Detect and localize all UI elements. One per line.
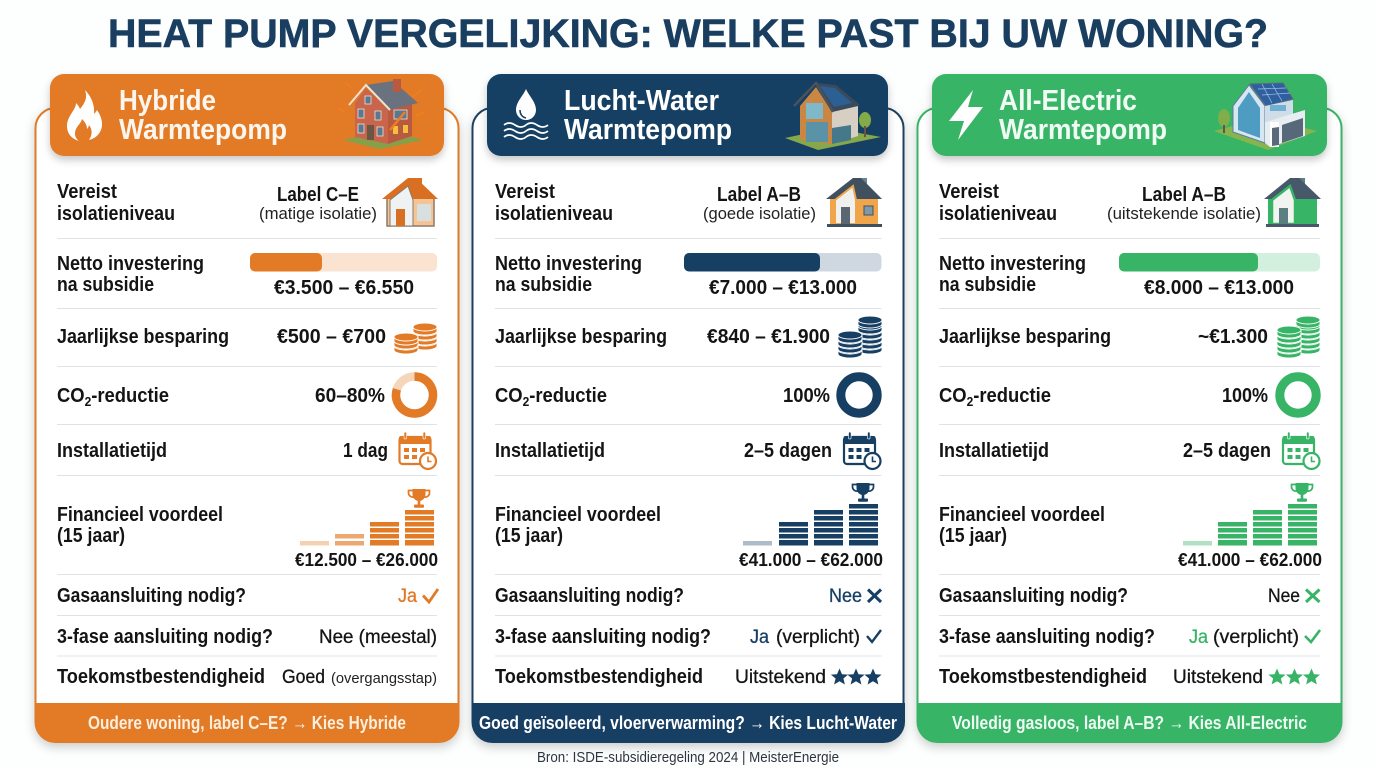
row: financieel voordeel <box>57 489 438 570</box>
row: isolatie <box>939 178 1321 227</box>
note: (matige isolatie) <box>259 204 377 223</box>
label: -reductie <box>529 385 607 407</box>
value: Label A–B <box>1142 183 1226 206</box>
icon: house <box>1264 178 1321 227</box>
row: co2 <box>57 376 433 414</box>
row: 3-fase <box>939 626 1320 648</box>
heading: warmtepomp: Warmtepomp <box>564 114 732 146</box>
label: Jaarlijkse besparing <box>939 326 1111 348</box>
source note: Bron: ISDE-subsidieregeling 2024 | MeisterEnergie <box>537 749 839 766</box>
footer <box>472 703 905 742</box>
icon: donut <box>841 377 877 413</box>
value: €12.500 – €26.000 <box>295 549 438 570</box>
label line 2: (15 jaar) <box>57 525 125 547</box>
value: 60–80% <box>315 384 385 407</box>
row: toekomstbestendigheid <box>939 666 1320 688</box>
label: CO <box>57 385 87 407</box>
icon: trophy <box>852 483 874 502</box>
note: (goede isolatie) <box>703 204 816 223</box>
icon: cross <box>868 590 881 602</box>
label line 2: isolatieniveau <box>495 203 613 225</box>
label: Netto investering <box>495 253 642 275</box>
value: Uitstekend <box>735 666 826 688</box>
value: 2–5 dagen <box>1183 439 1271 462</box>
icon: stars <box>831 668 882 684</box>
value: ja: Ja <box>1189 626 1208 648</box>
icon: stars <box>1268 668 1320 684</box>
row: toekomstbestendigheid <box>495 666 882 688</box>
footer text: Goed geïsoleerd, vloerverwarming? → Kies Lucht-Water <box>479 712 897 733</box>
value: ja: Ja <box>750 626 769 648</box>
icon: coins <box>838 316 882 358</box>
heading: all-electric: All-Electric <box>999 85 1137 117</box>
icon: cross <box>1306 590 1320 602</box>
value: Nee <box>1268 585 1300 607</box>
label: Gasaansluiting nodig? <box>495 585 684 607</box>
label line 2: (15 jaar) <box>495 525 563 547</box>
row: financieel voordeel <box>939 483 1322 570</box>
value: ~€1.300 <box>1198 325 1268 348</box>
row: toekomstbestendigheid <box>57 666 437 688</box>
icon: donut <box>1280 377 1316 413</box>
label: Toekomstbestendigheid <box>939 666 1147 688</box>
label: 2 <box>967 394 973 409</box>
icon: check <box>1305 630 1320 642</box>
label: CO <box>939 385 969 407</box>
label: Financieel voordeel <box>57 504 223 526</box>
label: Jaarlijkse besparing <box>495 326 667 348</box>
label: Vereist <box>495 181 555 203</box>
chart: stacked bars <box>743 504 878 546</box>
card outline <box>36 108 458 742</box>
label: Installatietijd <box>57 440 167 462</box>
bar fill <box>684 253 820 272</box>
row: 3-fase <box>57 626 437 648</box>
card outline <box>472 108 904 742</box>
label line 2: na subsidie <box>495 274 592 296</box>
chart: stacked bars <box>1183 504 1317 546</box>
icon: water drop and waves <box>504 89 548 139</box>
footer <box>917 703 1342 742</box>
icon: calendar <box>1282 432 1320 469</box>
value: verplicht: (verplicht) <box>776 626 860 648</box>
label: Toekomstbestendigheid <box>57 666 265 688</box>
value: 100% <box>783 384 830 407</box>
icon: trophy <box>408 489 430 508</box>
card outline <box>918 108 1342 742</box>
row: besparing <box>57 323 437 354</box>
value: €41.000 – €62.000 <box>739 549 883 570</box>
label: 2 <box>85 394 91 409</box>
bar fill <box>250 253 322 272</box>
value: Nee (meestal) <box>319 626 437 648</box>
label line 2: na subsidie <box>57 274 154 296</box>
label: -reductie <box>91 385 169 407</box>
row: gasaansluiting <box>57 585 438 607</box>
label line 2: isolatieniveau <box>57 203 175 225</box>
footer <box>35 703 459 742</box>
bar track <box>250 253 437 272</box>
value: 100% <box>1222 384 1268 407</box>
row: isolatie <box>495 178 882 227</box>
value: €7.000 – €13.000 <box>709 276 857 299</box>
icon: flame <box>67 90 102 141</box>
header: hybride <box>50 74 444 156</box>
value: Nee <box>829 585 862 607</box>
panel: hybride warmtepomp <box>35 74 459 742</box>
value: €500 – €700 <box>277 325 386 348</box>
label: 2 <box>523 394 529 409</box>
row: investering <box>57 253 437 299</box>
heading: warmtepomp: Warmtepomp <box>999 114 1167 146</box>
icon: house <box>826 178 882 227</box>
label: Financieel voordeel <box>495 504 661 526</box>
panel: all-electric warmtepomp <box>917 74 1342 742</box>
icon: coins <box>1277 316 1320 358</box>
label: 3-fase aansluiting nodig? <box>57 626 273 648</box>
icon: check <box>423 589 438 602</box>
icon: old brick house <box>338 79 424 149</box>
value: Label C–E <box>277 183 359 206</box>
value: Uitstekend <box>1173 666 1263 688</box>
label: Toekomstbestendigheid <box>495 666 703 688</box>
label: Vereist <box>939 181 999 203</box>
label: Jaarlijkse besparing <box>57 326 229 348</box>
icon: trophy <box>1292 483 1312 502</box>
bar track <box>1119 253 1320 272</box>
label: Installatietijd <box>495 440 605 462</box>
icon: lightning bolt <box>949 90 983 140</box>
value: €8.000 – €13.000 <box>1144 276 1294 299</box>
label: 3-fase aansluiting nodig? <box>939 626 1155 648</box>
bar fill <box>1119 253 1258 272</box>
row: co2 <box>495 377 877 413</box>
value: 2–5 dagen <box>744 439 832 462</box>
row: investering <box>495 253 882 299</box>
label: Netto investering <box>939 253 1086 275</box>
value: €840 – €1.900 <box>707 325 830 348</box>
icon: coins <box>394 323 437 354</box>
chart: stacked bars <box>300 510 434 546</box>
label: -reductie <box>973 385 1051 407</box>
icon: modern house <box>785 83 881 150</box>
row: 3-fase <box>495 626 881 648</box>
header: lucht-water <box>487 74 888 156</box>
row: gasaansluiting <box>939 585 1320 607</box>
row: financieel voordeel <box>495 483 883 570</box>
label: 3-fase aansluiting nodig? <box>495 626 711 648</box>
note: (overgangsstap) <box>331 670 437 687</box>
row: besparing <box>495 316 882 358</box>
title: HEAT PUMP VERGELIJKING: WELKE PAST BIJ UW WONING? <box>108 12 1268 56</box>
icon: donut <box>396 376 433 414</box>
value: Label A–B <box>717 183 801 206</box>
value: €41.000 – €62.000 <box>1178 549 1322 570</box>
heading: warmtepomp: Warmtepomp <box>119 114 287 146</box>
value: 1 dag <box>343 439 388 462</box>
row: installatietijd <box>57 432 436 469</box>
label: Vereist <box>57 181 117 203</box>
row: isolatie <box>57 178 438 226</box>
row: besparing <box>939 316 1320 358</box>
footer text: Oudere woning, label C–E? → Kies Hybride <box>88 712 406 733</box>
label line 2: na subsidie <box>939 274 1036 296</box>
label: Financieel voordeel <box>939 504 1105 526</box>
row: co2 <box>939 377 1316 413</box>
row: gasaansluiting <box>495 585 881 607</box>
label: Gasaansluiting nodig? <box>939 585 1128 607</box>
row: investering <box>939 253 1320 299</box>
label line 2: isolatieniveau <box>939 203 1057 225</box>
icon: calendar <box>844 432 880 469</box>
icon: house <box>382 178 438 226</box>
heading: lucht-water: Lucht-Water <box>564 85 719 117</box>
label: CO <box>495 385 525 407</box>
note: (uitstekende isolatie) <box>1107 204 1261 223</box>
footer text: Volledig gasloos, label A–B? → Kies All-Electric <box>952 712 1307 733</box>
row: installatietijd <box>939 432 1320 469</box>
label: Netto investering <box>57 253 204 275</box>
value: €3.500 – €6.550 <box>274 276 414 299</box>
row: installatietijd <box>495 432 880 469</box>
label: Installatietijd <box>939 440 1049 462</box>
heading: hybride: Hybride <box>119 85 216 117</box>
value: Goed <box>282 666 325 688</box>
icon: calendar <box>399 432 436 469</box>
value: Ja <box>398 585 417 607</box>
icon: all-electric house <box>1214 83 1317 150</box>
panel: lucht-water warmtepomp <box>472 74 905 742</box>
value: verplicht: (verplicht) <box>1213 626 1299 648</box>
icon: check <box>867 630 881 642</box>
label line 2: (15 jaar) <box>939 525 1007 547</box>
bar track <box>684 253 882 272</box>
label: Gasaansluiting nodig? <box>57 585 246 607</box>
header: all-electric <box>932 74 1327 156</box>
